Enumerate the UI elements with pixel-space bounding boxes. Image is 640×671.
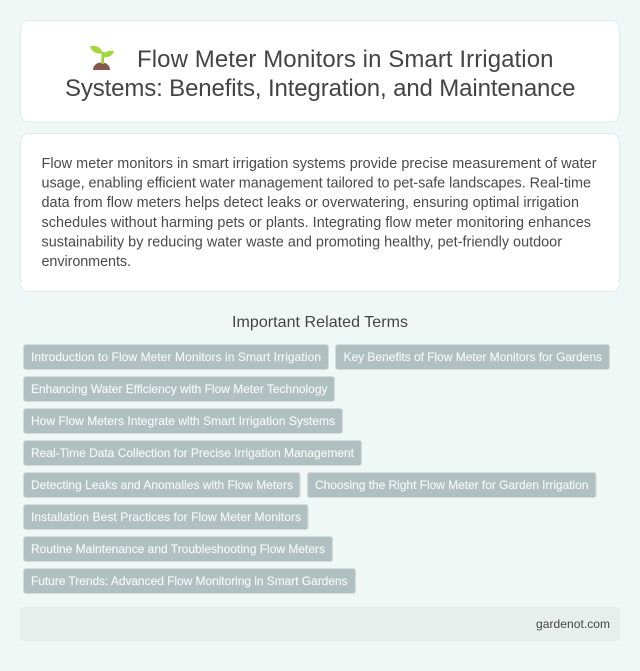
panel: title header bbox=[20, 20, 620, 122]
tag: water efficiency: Enhancing Water Efficiency with Flow Meter Technology bbox=[31, 382, 328, 396]
tag: integration: How Flow Meters Integrate with Smart Irrigation Systems bbox=[31, 414, 335, 428]
tag: real-time data: Real-Time Data Collection for Precise Irrigation Management bbox=[31, 446, 355, 460]
title: Systems: Benefits, Integration, and Maintenance bbox=[65, 75, 576, 102]
tag: maintenance bbox=[24, 536, 332, 562]
text block: summary: schedules without harming pets or plants. Integrating flow meter monitoring enhances bbox=[42, 215, 591, 231]
tag: integration bbox=[24, 408, 342, 434]
text block: summary: Flow meter monitors in smart irrigation systems provide precise measurement of water bbox=[42, 156, 597, 172]
tag: future trends: Future Trends: Advanced Flow Monitoring in Smart Gardens bbox=[31, 574, 348, 588]
tag: detecting leaks: Detecting Leaks and Anomalies with Flow Meters bbox=[31, 478, 293, 492]
text block: summary: data from flow meters helps detect leaks or overwatering, ensuring optimal irrigation bbox=[42, 195, 579, 211]
tag: real-time data bbox=[24, 440, 362, 466]
heading: important related terms: Important Related Terms bbox=[232, 314, 408, 331]
text block: summary: usage, enabling efficient water management tailored to pet-safe landscapes. Real-time bbox=[42, 176, 591, 192]
tag: key benefits bbox=[336, 344, 610, 370]
tag: introduction: Introduction to Flow Meter Monitors in Smart Irrigation bbox=[31, 350, 321, 364]
tag: introduction bbox=[24, 344, 328, 370]
tag: detecting leaks bbox=[24, 472, 300, 498]
tag: installation bbox=[24, 504, 308, 530]
title: Flow Meter Monitors in Smart Irrigation bbox=[137, 46, 554, 73]
tag: key benefits: Key Benefits of Flow Meter Monitors for Gardens bbox=[344, 350, 602, 364]
footer bbox=[20, 607, 620, 641]
tag: future trends bbox=[24, 568, 356, 594]
text block: summary: environments. bbox=[42, 254, 131, 270]
tag: water efficiency bbox=[24, 376, 334, 402]
title bbox=[65, 46, 576, 102]
icon: sprout bbox=[90, 46, 114, 70]
text block: summary: sustainability by reducing water waste and promoting healthy, pet-friendly outdoor bbox=[42, 234, 562, 250]
panel: summary paragraph bbox=[20, 134, 620, 292]
tag: choosing a meter bbox=[308, 472, 596, 498]
tag: installation: Installation Best Practices for Flow Meter Monitors bbox=[31, 510, 301, 524]
panel: related term tags bbox=[24, 344, 610, 594]
tag: maintenance: Routine Maintenance and Troubleshooting Flow Meters bbox=[31, 542, 325, 556]
text block: summary bbox=[42, 156, 597, 270]
footer text: site name: gardenot.com bbox=[536, 617, 610, 631]
tag: choosing a meter: Choosing the Right Flow Meter for Garden Irrigation bbox=[315, 478, 588, 492]
